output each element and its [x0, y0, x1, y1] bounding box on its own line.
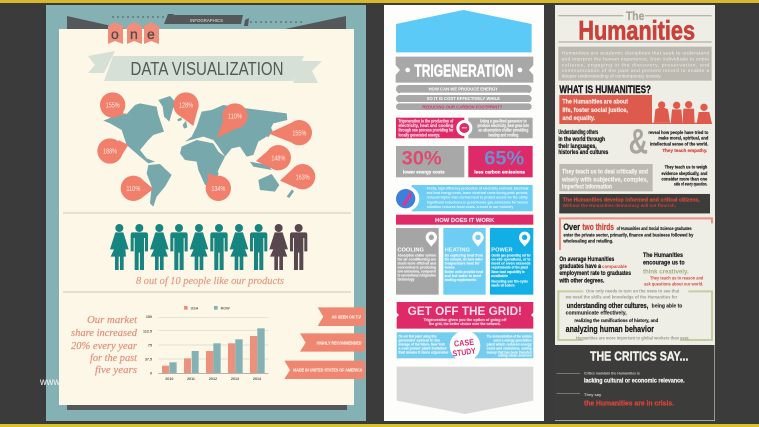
ribbon: as seen on tv: AS SEEN ON T.V: [332, 314, 362, 319]
text: understanding others: their languages,: [558, 143, 597, 150]
case study: average of the future, New York: [398, 342, 445, 346]
text: think creatively: They teach us to reason and: [650, 275, 704, 280]
text: market share statement: share increased: [71, 327, 137, 339]
bar chart: USA vs ROW: 2011: [187, 377, 195, 381]
text: employment rate: employment rate to graduates: [559, 271, 632, 277]
column: cooling: COOLING: [397, 247, 424, 253]
case study: that means it more expensive: [398, 350, 448, 354]
box: definition: [396, 118, 464, 138]
grey block: they teach us to deal: [559, 164, 653, 191]
bar chart: USA vs ROW: [143, 306, 268, 381]
red block with silhouettes: [559, 95, 712, 124]
pin: 155%: 155%: [106, 101, 120, 110]
pin: 110%: [121, 176, 153, 201]
case study: a new power plant installed: [398, 346, 447, 350]
band: how does it work: [396, 215, 533, 225]
pin: 134%: [206, 173, 231, 201]
grey block: they teach us to deal: They teach us to deal critically and: [562, 168, 648, 175]
column: heating: temperature heat for: [445, 261, 480, 265]
outline: over two thirds: [560, 218, 712, 250]
stat: 65%: less carbon emissions: [474, 170, 525, 175]
pin: 188%: 188%: [103, 147, 117, 156]
column: cooling: economical in producing: [398, 265, 436, 269]
stat: 65%: 65%: [484, 149, 524, 170]
stat: 30%: [396, 146, 464, 177]
text: employment rate: [559, 257, 632, 284]
pin: 155%: 155%: [292, 128, 307, 137]
text: employment rate: On average Humanities: [559, 257, 615, 263]
badge: one: o: [111, 26, 119, 42]
callout: efficiency: situation reduces local costs, a must in our industry: [427, 205, 514, 209]
title: the humanities: [558, 10, 712, 45]
red block with silhouettes: life, foster social justice,: [562, 107, 628, 114]
callout: efficiency: Significant reductions in greenhouse gas emissions for homes: [427, 200, 528, 204]
axis labels: 75: [148, 344, 152, 348]
panel: trigeneration infographic: [384, 5, 544, 421]
case study: The demonstration of the system: [487, 334, 532, 338]
pin: 188%: [97, 138, 128, 164]
text: employment rate: comparable: [602, 264, 627, 270]
case study: generator system in the: [398, 338, 440, 342]
column: power: available: [491, 274, 508, 278]
panel: the critics say: lacking cultural or economic relevance.: [584, 378, 685, 385]
pin: 148%: [256, 145, 291, 170]
badge: one: e: [147, 26, 155, 42]
text: reveal how people: make moral, spiritual, and: [658, 135, 708, 141]
outline: understanding other cultures: communicate effectively,: [566, 311, 627, 317]
case study: [397, 331, 533, 361]
outline: over two thirds: enter the private sector, primarily, finance and business followed by: [563, 233, 694, 238]
text: reveal how people: They teach empathy.: [662, 148, 708, 154]
bar chart: USA vs ROW: 2010: [165, 377, 173, 381]
pin: 148%: 148%: [271, 153, 286, 162]
text: market share statement: [71, 314, 138, 376]
case study: used a energy generation: [493, 338, 532, 342]
axis labels: [143, 315, 152, 376]
top banner: infographics: INFOGRAPHICS: [190, 18, 223, 23]
case study: money that has been invested: [487, 350, 532, 354]
outline: over two thirds: two thirds: [582, 222, 614, 232]
intro block: [558, 47, 712, 81]
case study: On our first plant using this: [398, 334, 437, 338]
legend: ROW: [221, 306, 230, 310]
question bands: SO IT IS COST EFFECTIVELY WHILE: [427, 96, 500, 101]
column: cooling: [396, 228, 439, 295]
outline: over two thirds: of Humanities and Social Science graduates: [617, 226, 692, 231]
box: definition: through one process providing for: [398, 128, 454, 133]
outline: understanding other cultures: understanding other cultures,: [567, 301, 648, 310]
intro block: and interpret the human experience, from individuals to entire: [562, 57, 710, 63]
title ribbon: data visualization: [88, 51, 322, 83]
text: they teach us to weigh: evidence skeptically, and: [661, 171, 707, 176]
callout: efficiency: Firstly, high efficiency production of electricity and heat. Electrical: [427, 186, 528, 190]
box: explanation: Using a gas-fired generator to: [480, 118, 527, 123]
box: definition: locally generated energy.: [398, 132, 440, 137]
text: think creatively: think creatively.: [643, 268, 689, 275]
outline: over two thirds: Over: [563, 222, 580, 232]
callout: efficiency: reduced higher than normal need to protect assets for the utility.: [427, 196, 529, 200]
text: employment rate: graduates have a: [559, 264, 602, 270]
box: explanation: an absorption chiller providing: [478, 128, 529, 133]
text: think creatively: ask questions about our world.: [644, 281, 703, 286]
top banner: infographics: [112, 14, 304, 26]
column: power: on-site operations, or to: [491, 257, 531, 261]
column: cooling: for air conditioning are: [398, 257, 436, 261]
map landmasses: [103, 96, 294, 207]
axis labels: 112.5: [143, 330, 152, 334]
banner: get off the grid: the grid, the better choice over the network.: [429, 322, 501, 326]
column: heating: and hot water to meet: [445, 274, 482, 278]
grey block: they teach us to deal: imperfect information: [562, 183, 612, 190]
intro block: deeper understanding of contemporary society.: [562, 73, 662, 79]
legend: [184, 306, 230, 310]
title: the humanities: Humanities: [578, 15, 695, 45]
title: the humanities: The: [626, 10, 645, 23]
banner: get off the grid: [397, 302, 533, 329]
case study: CASE: [454, 337, 475, 349]
panel: data visualization infographic: [46, 5, 366, 421]
text: market share statement: 20% every year: [71, 340, 138, 352]
column: heating: the exhaust, we have water: [445, 257, 484, 261]
outline: understanding other cultures: realizing the ramifications of history, and: [574, 318, 658, 324]
intro block: cultures, engaging in the discovery, preservation, and: [562, 63, 710, 69]
column: heating: homes: [445, 265, 455, 269]
watermark fragment: www: [39, 377, 61, 388]
world map with percentage pins: [97, 92, 315, 207]
column: heating: heating requirements: [445, 278, 476, 282]
outline: understanding other cultures: Humanities are more important to global workers than ever.: [576, 335, 689, 340]
heading: what is humanities: WHAT IS HUMANITIES?: [559, 84, 651, 96]
column: heating: HEATING: [445, 247, 470, 253]
column: power: waste oil boilers: [490, 283, 515, 287]
pin: 110%: 110%: [228, 112, 242, 121]
pin: 155%: [268, 120, 312, 145]
column: power: Onsite gas generating set for: [491, 253, 531, 257]
bar chart: USA vs ROW: 2014: [253, 377, 262, 381]
case study: costs and emissions, saving: [487, 346, 532, 350]
text: market share statement: for the past: [90, 352, 138, 364]
dark block: informed citizens: The Humanities develop informed and critical citizens.: [563, 197, 700, 203]
title band: trigeneration: [396, 57, 533, 83]
legend: USA: [191, 306, 199, 310]
text: think creatively: The Humanities: [643, 252, 683, 259]
pin: 163%: 163%: [296, 172, 310, 181]
axis labels: 37.5: [145, 358, 152, 362]
box: explanation: heating and cooling: [488, 132, 519, 137]
panel: the critics say: THE CRITICS SAY...: [590, 349, 688, 364]
column: cooling: to conventional refrigeration: [398, 273, 436, 277]
red block with silhouettes: The Humanities are about: [562, 99, 629, 106]
text: understanding others: Understanding others: [558, 129, 599, 136]
panel: the critics say: They say: [584, 392, 602, 397]
text: they teach us to weigh: consider more than one: [661, 177, 708, 182]
column: cooling: low emissions, compared: [398, 269, 436, 273]
question bands: [396, 85, 532, 110]
outline: understanding other cultures: One only needs to turn on the news to see that: [586, 289, 680, 294]
column: power: [490, 228, 533, 295]
badge: one: n: [130, 26, 138, 42]
column: heating: [443, 228, 486, 295]
panel: the critics say: the Humanities are in crisis.: [584, 398, 674, 407]
column: cooling: much more efficient and: [398, 261, 436, 265]
case study: using clean sources: [498, 354, 532, 358]
dark block: informed citizens: [559, 194, 710, 213]
case study: plant which reduced energy: [487, 342, 532, 346]
callout: efficiency: and heat energy costs, lower electrical costs during peak periods,: [427, 191, 528, 195]
footer arrow: [397, 367, 533, 414]
text: they teach us to weigh: They teach us to weigh: [665, 165, 707, 170]
grey block: they teach us to deal: wisely with subjective, complex,: [561, 176, 648, 183]
axis labels: 0: [150, 372, 152, 376]
column: power: Base load capability is: [491, 270, 525, 274]
panel: the critics say: Critics maintain the Humanities is: [584, 371, 641, 376]
column: power: meet or even exceeds: [491, 261, 531, 265]
column: power: POWER: [491, 247, 513, 253]
callout: efficiency: [394, 185, 533, 211]
axis labels: 150: [146, 315, 152, 319]
intro block: Humanities are academic disciplines that seek to understand: [562, 51, 710, 57]
column: heating: By capturing heat from: [445, 253, 483, 257]
panel: the critics say: [555, 345, 715, 421]
text: understanding others: in the world through: [558, 136, 605, 143]
band: how does it work: HOW DOES IT WORK: [435, 218, 495, 224]
people pictogram: 8 out of 10: [110, 224, 307, 270]
bar chart: USA vs ROW: 2012: [209, 377, 217, 381]
case study: STUDY: [452, 345, 477, 359]
text: they teach us to weigh: side of every question.: [674, 182, 707, 187]
text: market share statement: Our market: [87, 314, 138, 326]
panel: the humanities infographic: [555, 5, 715, 421]
pin: 134%: 134%: [211, 184, 226, 193]
ampersand: &: [629, 122, 648, 161]
box: definition: Trigeneration is the production of: [398, 118, 454, 123]
intro block: communication of the past and present record to enable a: [562, 68, 710, 74]
column: power: Recycling use fire-cycle: [491, 279, 528, 283]
outline: understanding other cultures: being able to: [652, 303, 683, 309]
red block with silhouettes: and equality.: [562, 115, 595, 122]
ribbons: claims: [284, 307, 365, 379]
stat: 30%: 30%: [402, 149, 442, 170]
caption: 8 out of 10: 8 out of 10 people like our products: [136, 276, 284, 287]
bar chart: USA vs ROW: 2013: [231, 377, 239, 381]
text: they teach us to weigh: [661, 165, 708, 187]
column: power: requirements of the plant: [491, 265, 529, 269]
pin: 110%: [217, 103, 248, 138]
stat: 65%: [468, 146, 533, 177]
dark block: informed citizens: Without the Humanities democracy will not flourish.: [563, 203, 676, 208]
text: reveal how people: reveal how people have tried to: [648, 130, 708, 136]
title band: trigeneration: TRIGENERATION: [414, 60, 513, 80]
outline: over two thirds: wholesaling and retailing.: [562, 238, 613, 243]
text: market share statement: five years: [95, 364, 137, 376]
ribbon: highly recommended: HIGHLY RECOMMENDED: [317, 340, 362, 345]
text: reveal how people: intellectual sense of the world.: [650, 141, 709, 147]
box: explanation: produce electricity, heat goes into: [477, 123, 529, 128]
text: think creatively: [643, 252, 704, 286]
text: think creatively: encourage us to: [643, 260, 685, 267]
outline: understanding other cultures: [558, 289, 712, 340]
banner: get off the grid: GET OFF THE GRID!: [408, 304, 522, 318]
text: understanding others: [558, 129, 609, 156]
column: heating: Boiler units provide heat: [445, 270, 484, 274]
pin: 163%: [280, 164, 315, 189]
banner: get off the grid: Trigeneration gives you the option of going off: [424, 318, 507, 322]
icon: connector: [456, 120, 472, 136]
box: definition: electricity, heat and cooling: [398, 123, 454, 128]
bars: [162, 336, 257, 373]
column: cooling: Absorption chiller system: [398, 253, 436, 257]
badge: one: [108, 22, 159, 44]
outline: understanding other cultures: we need the skills and knowledge of the Humanities for: [565, 295, 677, 300]
icon: people silhouettes: [654, 101, 712, 124]
column: cooling: technology: [398, 277, 414, 281]
text: understanding others: histories and cultures: [558, 149, 609, 156]
pin: 110%: 110%: [126, 184, 141, 193]
title ribbon: data visualization: DATA VISUALIZATION: [130, 59, 284, 79]
pin: 128%: 128%: [179, 101, 193, 110]
question bands: REDUCING OUR CARBON FOOTPRINT?: [422, 104, 502, 109]
pin: 128%: [173, 92, 199, 126]
outline: understanding other cultures: analyzing human behavior: [566, 324, 654, 334]
box: explanation: [468, 118, 533, 138]
text: employment rate: with other degrees.: [559, 278, 605, 284]
text: reveal how people: [648, 130, 709, 154]
header arrow: [396, 10, 532, 52]
question bands: HOW CAN WE PRODUCE ENERGY: [429, 87, 499, 92]
pin: 155%: [100, 92, 128, 118]
ribbon: made in united states: MADE IN UNITED STATES OF AMERICA: [293, 368, 363, 373]
stat: 30%: lower energy costs: [403, 170, 445, 175]
